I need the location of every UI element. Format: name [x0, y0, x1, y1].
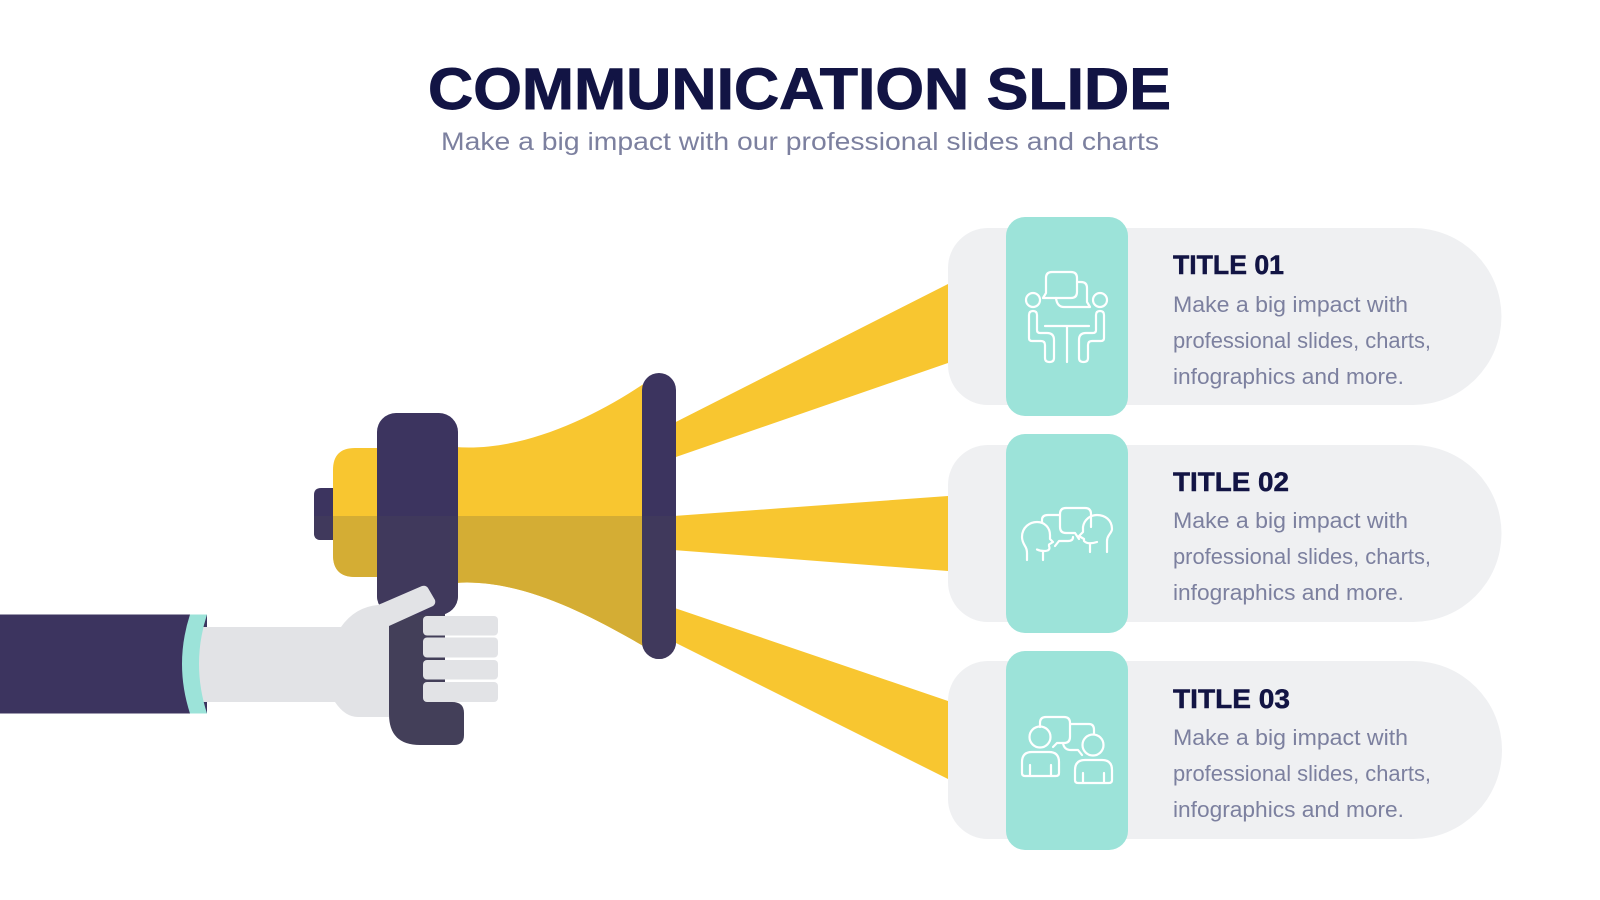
icon: two people conversing — [1022, 717, 1112, 783]
body text 01: professional slides, charts, — [1173, 328, 1431, 353]
megaphone rim — [642, 373, 676, 659]
illustration: megaphone — [314, 373, 676, 745]
icon tile 01 — [1006, 217, 1128, 416]
body text 01 — [1173, 292, 1431, 389]
icon tile 03 — [1006, 651, 1128, 850]
sound beam: top — [660, 284, 948, 462]
illustration: hand — [330, 586, 498, 717]
heading 03: TITLE 03 — [1173, 684, 1290, 714]
megaphone band — [377, 413, 458, 615]
panel background 02 — [948, 445, 1502, 622]
sound beam: bottom — [660, 603, 948, 779]
heading 01: TITLE 01 — [1173, 250, 1284, 280]
body text 03 — [1173, 725, 1431, 822]
panel background 01 — [948, 228, 1501, 405]
body text 02 — [1173, 508, 1431, 605]
illustration: forearm — [195, 627, 350, 702]
megaphone lower shading — [314, 516, 676, 659]
body text 01: infographics and more. — [1173, 364, 1404, 389]
title: COMMUNICATION SLIDE — [428, 57, 1171, 122]
body text 03: professional slides, charts, — [1173, 761, 1431, 786]
illustration: cuff — [182, 614, 207, 714]
sound beam: middle — [660, 496, 948, 571]
panel: item 01 — [948, 217, 1501, 416]
megaphone handle — [389, 600, 464, 745]
finger 4 — [423, 682, 498, 702]
finger 3 — [423, 660, 498, 680]
body text 03: infographics and more. — [1173, 797, 1404, 822]
body text 02: professional slides, charts, — [1173, 544, 1431, 569]
icon: people meeting at a table — [1026, 272, 1107, 362]
megaphone horn — [455, 383, 645, 647]
finger 1 — [423, 616, 498, 636]
body text 01: Make a big impact with — [1173, 292, 1408, 317]
panel: item 02 — [948, 434, 1502, 633]
megaphone rear knob — [314, 488, 333, 540]
icon tile 02 — [1006, 434, 1128, 633]
icon: two heads talking — [1022, 508, 1112, 560]
heading 02: TITLE 02 — [1173, 467, 1289, 497]
panel: item 03 — [948, 651, 1502, 850]
body text 02: infographics and more. — [1173, 580, 1404, 605]
palm and thumb — [330, 586, 435, 717]
panel background 03 — [948, 661, 1502, 839]
subtitle: Make a big impact with our professional slides and charts — [441, 128, 1159, 156]
body text 02: Make a big impact with — [1173, 508, 1408, 533]
finger 2 — [423, 638, 498, 658]
body text 03: Make a big impact with — [1173, 725, 1408, 750]
illustration: arm sleeve — [0, 614, 207, 714]
megaphone body — [333, 448, 380, 577]
